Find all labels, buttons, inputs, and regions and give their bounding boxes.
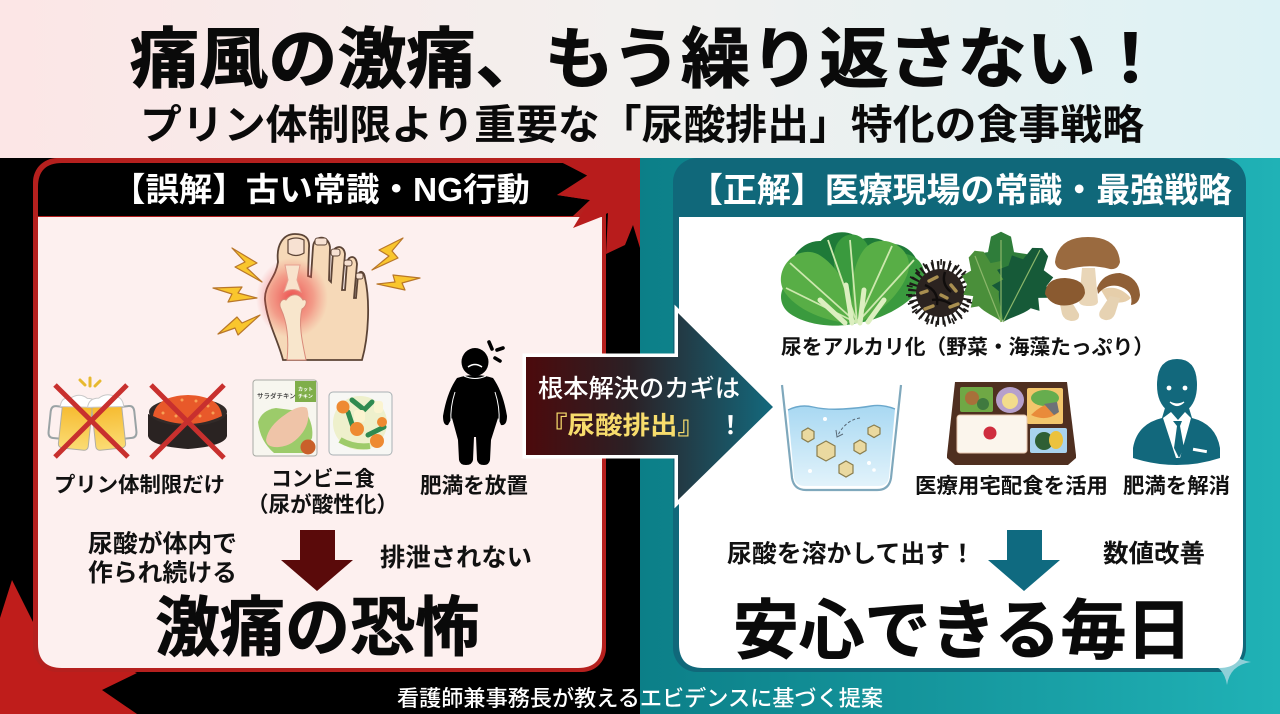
- label: obesity ignored: 肥満を放置: [420, 474, 528, 498]
- icon: obese silhouette: [443, 342, 507, 465]
- burst: lower left: [0, 580, 137, 714]
- panel header band: [38, 163, 590, 216]
- panel body: [679, 217, 1243, 668]
- icon: shiitake mushrooms: [1045, 237, 1140, 321]
- text: dissolve uric acid: 尿酸を溶かして出す！: [727, 540, 975, 568]
- header background: [0, 0, 1280, 158]
- title: 痛風の激痛、もう繰り返さない！: [130, 22, 1165, 96]
- icon: inflamed foot: [256, 234, 368, 360]
- icon: salad chicken pack: カット: [298, 386, 313, 393]
- text: uric acid keeps being produced: 尿酸が体内で: [88, 529, 237, 558]
- panel frame: [673, 158, 1246, 672]
- icon: salad chicken pack: [253, 380, 317, 456]
- label: purine only: プリン体制限だけ: [54, 474, 225, 497]
- label: delivery meal: 医療用宅配食を活用: [915, 474, 1108, 498]
- panel heading: 【正解】医療現場の常識・最強戦略: [689, 172, 1232, 210]
- icon: convenience store salad: [329, 392, 392, 455]
- label: acidic urine: （尿が酸性化）: [247, 492, 398, 517]
- label: alkalize urine: 尿をアルカリ化（野菜・海藻たっぷり）: [781, 336, 1154, 359]
- result: fear of severe pain: 激痛の恐怖: [155, 591, 480, 664]
- arrow: root solution: [526, 313, 773, 500]
- arrow text: excretion: 『尿酸排出』: [540, 412, 705, 440]
- icon: water glass with crystals: [782, 385, 901, 490]
- icon: healthy businessman: [1133, 359, 1220, 465]
- label: resolve obesity: 肥満を解消: [1123, 474, 1230, 498]
- text: not excreted: 排泄されない: [380, 544, 532, 572]
- text: values improve: 数値改善: [1103, 540, 1205, 568]
- icon: pain bolts: [213, 238, 420, 335]
- icon: salad chicken pack: サラダチキン: [257, 391, 296, 400]
- arrow: down to result: [988, 530, 1060, 591]
- icon: salad chicken pack: チキン: [298, 394, 313, 400]
- arrow: down to fear: [281, 530, 353, 591]
- icon: beer mugs crossed out: [47, 378, 138, 457]
- icon: dark green leaves: [950, 232, 1069, 336]
- icon: sparkle: [1204, 640, 1251, 685]
- icon: hijiki seaweed: [909, 262, 971, 324]
- subtitle: プリン体制限より重要な「尿酸排出」特化の食事戦略: [140, 102, 1144, 148]
- icon: salmon roe sushi crossed out: [148, 385, 227, 458]
- right teal background: [640, 158, 1280, 714]
- left black background: [0, 158, 640, 714]
- label: convenience food: コンビニ食: [271, 468, 375, 491]
- panel: correct answer: [673, 158, 1251, 685]
- arrow text: excretion: ！: [718, 412, 743, 440]
- text: uric acid keeps being produced: 作られ続ける: [88, 559, 237, 587]
- icon: leafy lettuce: [770, 227, 934, 343]
- footer note: 看護師兼事務長が教えるエビデンスに基づく提案: [397, 686, 883, 711]
- text: uric acid keeps being produced: [88, 529, 237, 587]
- panel body: [38, 217, 602, 668]
- result: reassuring days: 安心できる毎日: [733, 594, 1192, 667]
- panel heading: 【誤解】古い常識・NG行動: [112, 171, 530, 208]
- icon: medical meal bento: [947, 382, 1076, 465]
- burst: upper right of left panel: [557, 158, 640, 254]
- arrow text: the key is: 根本解決のカギは: [538, 375, 740, 403]
- panel: misconception: [33, 158, 606, 672]
- burst overlap on panel corner: [557, 160, 606, 228]
- panel frame: [33, 158, 606, 672]
